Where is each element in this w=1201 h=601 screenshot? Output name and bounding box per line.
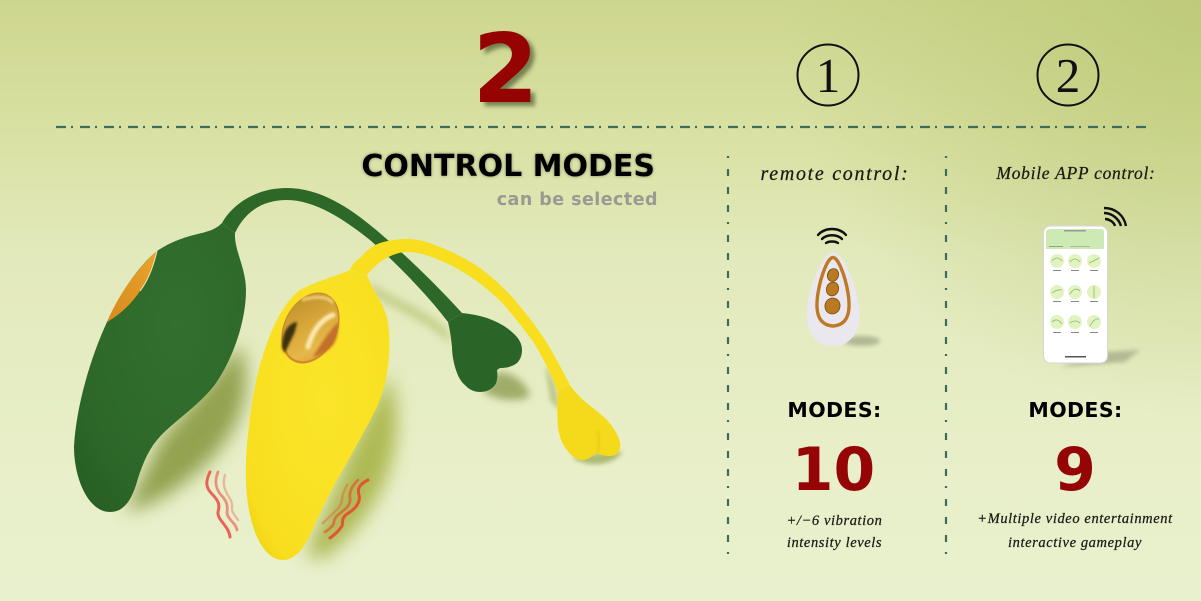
text: video and gameplay xyxy=(977,511,1173,551)
icon: wifi above phone xyxy=(1104,208,1126,226)
heading: control modes: CONTROL MODES xyxy=(361,149,655,184)
app mode icons xyxy=(1050,254,1101,329)
circled number 2: 2 xyxy=(1056,48,1080,103)
number 10: 10 xyxy=(792,435,875,505)
subheading: can be selected: can be selected xyxy=(497,190,658,210)
text: vibration levels: intensity levels xyxy=(787,535,882,551)
circled number 2 xyxy=(1038,44,1098,106)
remote buttons xyxy=(823,267,842,316)
label: mobile app control: Mobile APP control: xyxy=(995,163,1156,183)
yellow body xyxy=(246,270,390,560)
text: vibration levels xyxy=(786,513,883,551)
yellow heart tip xyxy=(557,385,620,460)
big number 2: 2 xyxy=(477,19,543,129)
remote control device xyxy=(807,252,880,346)
circled number 1 xyxy=(798,44,858,106)
shadows xyxy=(125,282,623,558)
gold ring on remote xyxy=(817,258,849,326)
big number 2: 2 xyxy=(472,15,539,125)
green body gold button xyxy=(107,251,157,322)
number 9: 9 xyxy=(1054,435,1096,505)
green stem xyxy=(222,188,462,322)
icon: wifi above remote xyxy=(818,229,846,243)
yellow body gold button xyxy=(270,283,351,373)
label: remote control: remote control: xyxy=(760,163,910,185)
text: vibration levels: +/−6 vibration xyxy=(786,513,883,529)
vibration lines left xyxy=(207,472,238,537)
green heart tip xyxy=(448,313,522,392)
circled number 1: 1 xyxy=(816,48,840,103)
modes label right: MODES: xyxy=(1028,398,1123,422)
vibration lines right xyxy=(323,480,368,538)
text: video and gameplay: +Multiple video entertainment xyxy=(977,511,1173,527)
text: video and gameplay: interactive gameplay xyxy=(1008,535,1142,551)
yellow stem xyxy=(350,239,570,392)
green body xyxy=(74,223,246,512)
modes label left: MODES: xyxy=(787,398,882,422)
phone with app xyxy=(1044,226,1140,367)
product photo: two mango vibrators xyxy=(74,188,623,560)
